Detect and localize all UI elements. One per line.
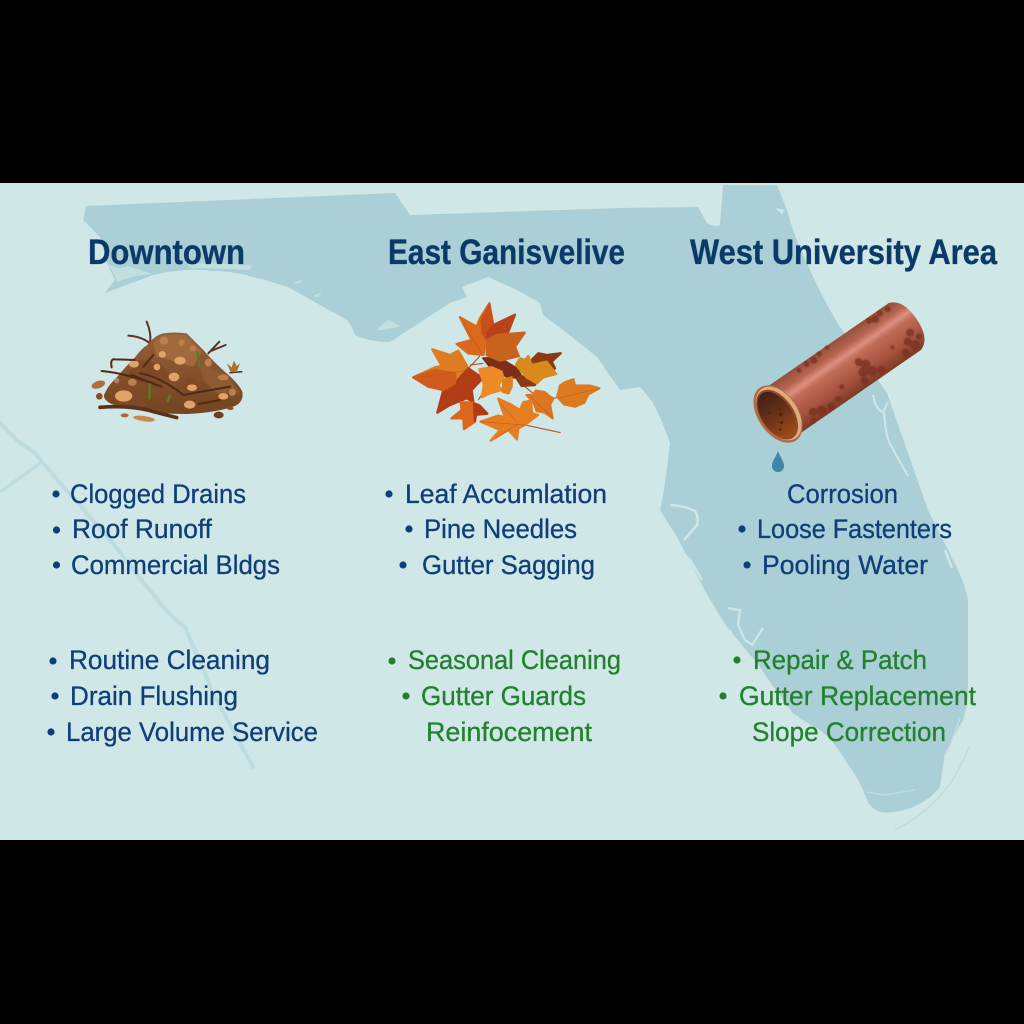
heading: East Ganisvelive: East Ganisvelive: [388, 233, 625, 272]
list: solutions: Repair & Patch: [753, 645, 927, 675]
list: solutions: Reinfocement: [426, 717, 593, 747]
panel: Downtown: [47, 233, 318, 747]
list: solutions: Gutter Guards: [421, 681, 586, 711]
list: solutions: [719, 645, 977, 747]
list: problems: [52, 479, 280, 580]
list: problems: Clogged Drains: [70, 479, 246, 509]
icon: autumn leaves: [413, 303, 600, 441]
list: solutions: [47, 645, 318, 747]
list: solutions: Gutter Replacement: [739, 681, 977, 711]
list: solutions: [388, 645, 621, 747]
list: problems: Gutter Sagging: [422, 550, 595, 580]
list: problems: Roof Runoff: [72, 514, 213, 544]
list: problems: Pooling Water: [762, 550, 928, 580]
icon: corroded pipe: [743, 292, 934, 452]
icon: water drop: [772, 451, 784, 472]
icon: debris pile: [91, 322, 243, 423]
list: solutions: Drain Flushing: [70, 681, 238, 711]
list: solutions: Seasonal Cleaning: [408, 645, 621, 675]
bottom black band: [0, 840, 1024, 1024]
list: solutions: Slope Correction: [752, 717, 946, 747]
panel: West University Area: [690, 233, 997, 747]
list: problems: Leaf Accumlation: [405, 479, 607, 509]
background panel: [0, 183, 1024, 840]
list: problems: Pine Needles: [424, 514, 577, 544]
list: problems: [738, 479, 952, 580]
list: problems: [385, 479, 607, 580]
map: Florida silhouette with roads: [0, 185, 970, 830]
list: problems: Loose Fastenters: [757, 514, 952, 544]
list: problems: Commercial Bldgs: [71, 550, 280, 580]
list: solutions: Large Volume Service: [66, 717, 318, 747]
list: solutions: Routine Cleaning: [69, 645, 270, 675]
panel: East Ganisvelive: [385, 233, 625, 747]
top black band: [0, 0, 1024, 183]
list: problems: Corrosion: [787, 479, 898, 509]
heading: Downtown: Downtown: [88, 233, 245, 272]
